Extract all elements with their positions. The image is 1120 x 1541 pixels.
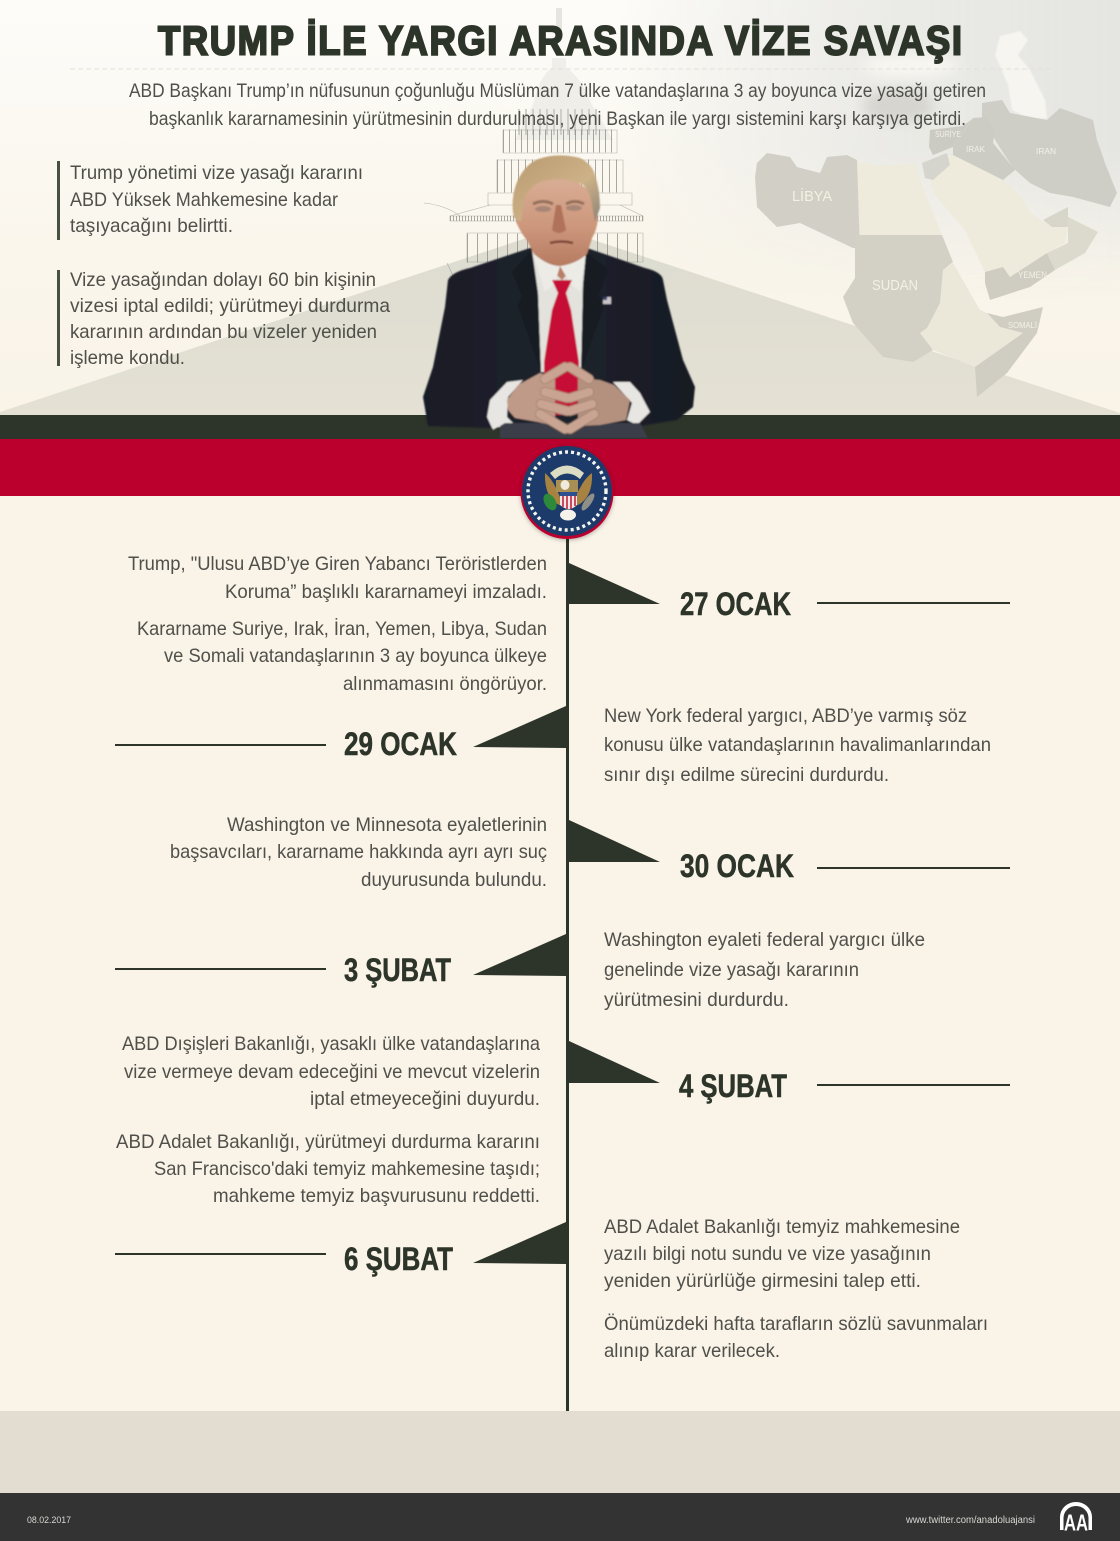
- timeline axis: [566, 535, 569, 1411]
- event: 6 Subat: [115, 1222, 566, 1277]
- text: 27 Ocak: ve Somali vatandaşlarının 3 ay boyunca ülkeye: [164, 645, 547, 667]
- intro paragraph: başkanlık kararnamesinin yürütmesinin durdurulması, yeni Başkan ile yargı sistemini karşı karşıya getirdi.: [149, 109, 966, 130]
- Arabia: [925, 155, 1068, 277]
- country: Libya: [755, 153, 860, 248]
- text: 29 Ocak: konusu ülke vatandaşlarının havalimanlarından: [604, 734, 991, 756]
- text: 6 Subat: yeniden yürürlüğe girmesini talep etti.: [604, 1270, 921, 1292]
- hair: [513, 155, 600, 222]
- eagle wings: [545, 473, 592, 505]
- country: Libya: LİBYA: [792, 187, 832, 205]
- lapels: [512, 250, 608, 372]
- face details: [533, 202, 584, 243]
- side note: Supreme Court: [57, 161, 363, 240]
- text: 27 Ocak: Trump, "Ulusu ABD’ye Giren Yabancı Teröristlerden: [128, 553, 547, 575]
- text: 6 Subat: [604, 1216, 988, 1362]
- header background: [0, 0, 1120, 415]
- intro paragraph: ABD Başkanı Trump’ın nüfusunun çoğunluğu Müslüman 7 ülke vatandaşlarına 3 ay boyunca vize yasağı getiren: [129, 81, 986, 102]
- side note: 60 thousand visas: kararının ardından bu vizeler yeniden: [70, 321, 377, 343]
- title: TRUMP İLE YARGI ARASINDA VİZE SAVAŞI: [158, 19, 962, 64]
- text: 29 Ocak: sınır dışı edilme sürecini durdurdu.: [604, 764, 889, 786]
- country: Suriye: [929, 119, 972, 155]
- text: 4 Subat: ABD Adalet Bakanlığı, yürütmeyi durdurma kararını: [116, 1131, 540, 1153]
- presidential seal: [520, 446, 614, 539]
- country: Sudan: [843, 235, 953, 362]
- text: 3 Subat: genelinde vize yasağı kararının: [604, 959, 859, 981]
- footer date: 08.02.2017: [27, 1515, 71, 1526]
- side note: 60 thousand visas: vizesi iptal edildi; yürütmeyi durdurma: [70, 295, 390, 317]
- text: 30 Ocak: duyurusunda bulundu.: [361, 869, 547, 891]
- side note: 60 thousand visas: [57, 269, 390, 369]
- collar: [532, 250, 586, 292]
- head: [516, 170, 598, 266]
- text: 4 Subat: [116, 1033, 540, 1207]
- cuffs: [487, 380, 523, 430]
- country: Somali: [975, 307, 1043, 397]
- side note: Supreme Court: ABD Yüksek Mahkemesine kadar: [70, 189, 338, 211]
- country: Iran: [982, 100, 1117, 207]
- Oman: [1047, 217, 1098, 270]
- country: Yemen: [985, 253, 1055, 300]
- text: 30 Ocak: [170, 814, 547, 891]
- flag pin: [603, 297, 611, 304]
- text: 6 Subat: yazılı bilgi notu sundu ve vize yasağının: [604, 1243, 931, 1265]
- text: 6 Subat: Önümüzdeki hafta tarafların sözlü savunmaları: [604, 1313, 988, 1335]
- cloud: [560, 510, 576, 520]
- banner: [550, 466, 584, 479]
- country: Suriye: SURİYE: [935, 130, 961, 139]
- event: 30 Ocak: 30 OCAK: [680, 848, 794, 884]
- country: Sudan: SUDAN: [872, 277, 918, 294]
- desk folder: [500, 423, 648, 438]
- side note: Supreme Court: Trump yönetimi vize yasağı kararını: [70, 162, 363, 184]
- text: 4 Subat: vize vermeye devam edeceğini ve mevcut vizelerin: [124, 1061, 540, 1083]
- event: 4 Subat: [569, 1041, 1010, 1104]
- text: 3 Subat: Washington eyaleti federal yargıcı ülke: [604, 929, 925, 951]
- text: 4 Subat: San Francisco'daki temyiz mahkemesine taşıdı;: [154, 1158, 540, 1180]
- Egypt: [857, 162, 942, 235]
- arrows: [579, 492, 597, 512]
- country: Irak: [953, 117, 1015, 180]
- footer link: www.twitter.com/anadoluajansi: [905, 1515, 1035, 1526]
- event: 27 Ocak: 27 OCAK: [680, 586, 791, 622]
- text: 27 Ocak: [128, 553, 547, 695]
- country: Somali: SOMALİ: [1008, 321, 1037, 330]
- olive branch: [541, 491, 559, 513]
- shirt: [532, 252, 586, 372]
- red band: [0, 439, 1120, 496]
- text: 29 Ocak: New York federal yargıcı, ABD’ye varmış söz: [604, 705, 967, 727]
- text: 4 Subat: ABD Dışişleri Bakanlığı, yasaklı ülke vatandaşlarına: [122, 1033, 540, 1055]
- Jordan: [922, 153, 950, 180]
- event: 3 Subat: [115, 934, 566, 988]
- side note: 60 thousand visas: işleme kondu.: [70, 347, 185, 369]
- portrait: [423, 155, 695, 438]
- intro paragraph: [129, 81, 986, 130]
- Ethiopia: [920, 263, 1023, 367]
- side note: Supreme Court: taşıyacağını belirtti.: [70, 215, 233, 237]
- map of banned countries: [755, 100, 1117, 397]
- dark desk band: [0, 415, 1120, 439]
- tie: [544, 280, 579, 415]
- event: 29 Ocak: [115, 706, 566, 762]
- footer: [0, 1493, 1120, 1541]
- icon: Anadolu Agency logo: [1060, 1502, 1092, 1536]
- text: 3 Subat: [604, 929, 925, 1011]
- event: 30 Ocak: [569, 820, 1010, 884]
- event: 27 Ocak: [569, 563, 1010, 622]
- event: 6 Subat: 6 ŞUBAT: [344, 1241, 453, 1277]
- text: 4 Subat: iptal etmeyeceğini duyurdu.: [310, 1088, 540, 1110]
- neck: [532, 235, 586, 280]
- text: 30 Ocak: başsavcıları, kararname hakkında ayrı ayrı suç: [170, 841, 547, 863]
- capitol building drawing: [424, 8, 643, 280]
- text: 3 Subat: yürütmesini durdurdu.: [604, 989, 789, 1011]
- side note: 60 thousand visas: Vize yasağından dolayı 60 bin kişinin: [70, 269, 376, 291]
- bottom band: [0, 1411, 1120, 1493]
- shield: [560, 492, 577, 509]
- text: 29 Ocak: [604, 705, 991, 786]
- country: Yemen: YEMEN: [1018, 270, 1047, 280]
- event: 4 Subat: 4 ŞUBAT: [679, 1068, 787, 1104]
- event: 29 Ocak: 29 OCAK: [344, 726, 457, 762]
- text: 6 Subat: alınıp karar verilecek.: [604, 1340, 780, 1362]
- country: Irak: IRAK: [966, 144, 985, 154]
- text: 6 Subat: ABD Adalet Bakanlığı temyiz mahkemesine: [604, 1216, 960, 1238]
- event: 3 Subat: 3 ŞUBAT: [344, 952, 451, 988]
- text: 30 Ocak: Washington ve Minnesota eyaletlerinin: [227, 814, 547, 836]
- text: 27 Ocak: Koruma” başlıklı kararnameyi imzaladı.: [225, 581, 547, 603]
- text: 4 Subat: mahkeme temyiz başvurusunu reddetti.: [213, 1185, 540, 1207]
- hands: [507, 367, 630, 429]
- jacket: [423, 248, 695, 428]
- icon: Anadolu Agency logo: AA: [1064, 1510, 1088, 1536]
- text: 27 Ocak: alınmamasını öngörüyor.: [343, 673, 547, 695]
- country: Iran: IRAN: [1036, 146, 1056, 156]
- text: 27 Ocak: Kararname Suriye, Irak, İran, Yemen, Libya, Sudan: [137, 617, 547, 640]
